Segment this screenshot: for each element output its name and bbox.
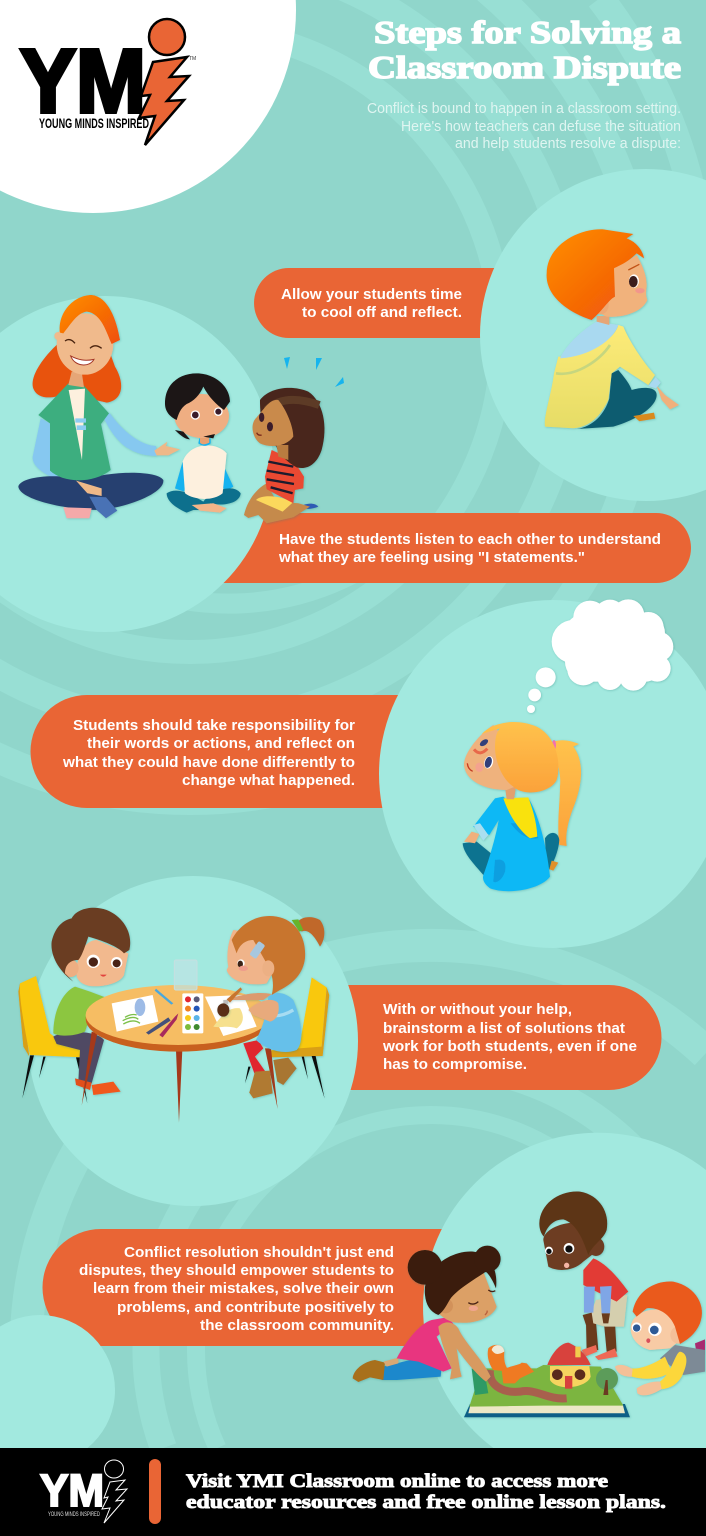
logo dot (149, 19, 185, 55)
left chair (18, 976, 87, 1103)
illustration: thinking girl (463, 599, 673, 891)
text: cool off: Allow your students time (281, 286, 462, 303)
text: conclusion: problems, and contribute positively to (117, 1299, 394, 1316)
pencils (146, 1017, 171, 1035)
head (547, 229, 647, 325)
circle: teacher (0, 296, 273, 632)
girl with ponytail (217, 916, 324, 1098)
footer band (0, 1448, 706, 1536)
circle: thinking girl (379, 600, 706, 948)
illustration: children and pop-up book (353, 1192, 705, 1417)
intro text: Here's how teachers can defuse the situation (401, 119, 681, 135)
text: brainstorm (382, 1001, 637, 1073)
jacket and legs (545, 322, 679, 429)
circle: top right (480, 169, 706, 501)
glass of water (174, 960, 197, 990)
teacher (18, 295, 180, 518)
text: conclusion: learn from their mistakes, solve their own (93, 1280, 394, 1297)
house (550, 1366, 591, 1387)
boy lying down (615, 1281, 705, 1395)
girl (463, 722, 581, 891)
footer logo dot (104, 1460, 124, 1478)
table (82, 960, 278, 1123)
panel: orange pill, responsibility (31, 695, 420, 808)
circle: book scene (423, 1133, 706, 1448)
trademark: TM (189, 56, 196, 62)
panel: orange pill, listen (200, 513, 691, 583)
standing boy (539, 1192, 628, 1360)
footer logo letters: YM (40, 1465, 104, 1516)
title: Steps for Solving a (374, 14, 681, 50)
footer logo bolt (102, 1480, 127, 1523)
text: responsibility: their words or actions, and reflect on (87, 735, 355, 752)
right paper (205, 995, 257, 1036)
text: brainstorm: brainstorm a list of solutions that (383, 1020, 625, 1037)
text: listen: Have the students listen to each other to understand (279, 531, 661, 548)
footer text: Visit YMI Classroom online to access more (186, 1471, 608, 1492)
icon: blue surprise sparks (284, 357, 344, 387)
text: responsibility: change what happened. (182, 772, 355, 789)
text: cool off: to cool off and reflect. (302, 304, 462, 321)
intro text: and help students resolve a dispute: (455, 136, 681, 152)
panel: orange pill, brainstorm (330, 985, 662, 1090)
illustration: teacher and two students (18, 295, 325, 523)
right chair (245, 977, 329, 1099)
text: conclusion (79, 1244, 394, 1334)
left paper (112, 995, 158, 1032)
boy with green sweater (51, 908, 134, 1095)
footer logo tagline: YOUNG MINDS INSPIRED (48, 1511, 100, 1518)
circle: table scene (28, 876, 358, 1206)
fox (488, 1345, 510, 1372)
text: brainstorm: has to compromise. (383, 1056, 527, 1073)
text: conclusion: the classroom community. (200, 1317, 394, 1334)
footer logo (40, 1460, 127, 1523)
circle: bottom left (0, 1315, 115, 1465)
white logo circle (0, 0, 296, 213)
text: cool off (281, 286, 462, 321)
text: listen: what they are feeling using "I statements." (278, 549, 585, 566)
logo bolt (139, 57, 189, 145)
pop-up book (464, 1343, 630, 1417)
title (368, 14, 681, 85)
intro text: Conflict is bound to happen in a classroom setting. (367, 101, 681, 117)
girl in striped shirt (244, 388, 325, 523)
text: brainstorm: work for both students, even if one (382, 1038, 637, 1055)
tree (596, 1368, 618, 1390)
paint palette (182, 993, 203, 1033)
footer text: educator resources and free online lesson plans. (186, 1492, 666, 1513)
text: conclusion: disputes, they should empower students to (79, 1262, 394, 1279)
logo: YMI (20, 19, 196, 145)
text: responsibility (62, 717, 355, 789)
intro text (367, 101, 681, 152)
illustration: children painting at table (18, 908, 329, 1123)
text: brainstorm: With or without your help, (383, 1001, 572, 1018)
title: Classroom Dispute (368, 49, 681, 85)
logo tagline: YOUNG MINDS INSPIRED (39, 116, 149, 131)
footer divider (149, 1459, 161, 1524)
kneeling girl (353, 1246, 501, 1382)
illustration: boy with red hair (545, 229, 679, 429)
panel: orange pill, cool off (254, 268, 510, 338)
logo letters: YM (20, 32, 146, 132)
text: responsibility: what they could have done differently to (62, 754, 355, 771)
boy in white shirt (165, 373, 241, 513)
text: responsibility: Students should take responsibility for (73, 717, 355, 734)
text: conclusion: Conflict resolution shouldn't just end (124, 1244, 394, 1261)
panel: orange pill, conclusion (43, 1229, 470, 1346)
text: listen (278, 531, 661, 566)
thought bubble (527, 599, 673, 713)
footer text (186, 1471, 666, 1513)
